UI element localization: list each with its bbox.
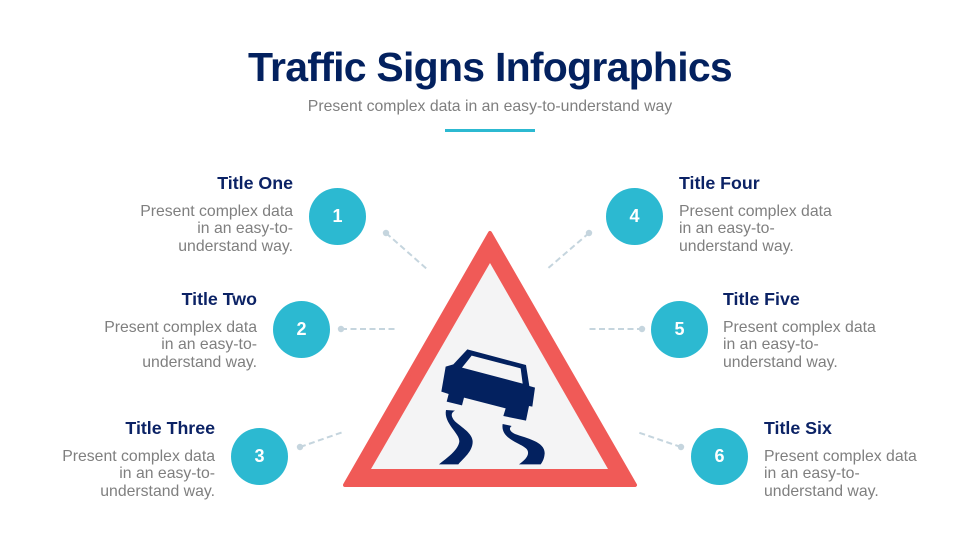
item 1: Title One: [217, 173, 293, 193]
icon: skidding car: [439, 349, 545, 464]
item 5: Present complex data: [723, 319, 876, 336]
item 1: understand way.: [178, 238, 293, 255]
badge 1: [309, 188, 366, 245]
badge 3: [231, 428, 288, 485]
title: Traffic Signs Infographics: [248, 44, 732, 90]
item 2: Present complex data: [104, 319, 257, 336]
item 4: understand way.: [679, 238, 794, 255]
item 2: understand way.: [142, 354, 257, 371]
item 5: in an easy-to-: [723, 336, 819, 353]
badge 6: [691, 428, 748, 485]
badge 3: 3: [254, 446, 264, 466]
item 2: [104, 289, 258, 371]
item 4: Title Four: [679, 173, 760, 193]
item 4: [679, 173, 832, 255]
item 6: in an easy-to-: [764, 465, 860, 482]
title underline: [445, 129, 535, 132]
badge 1: 1: [332, 206, 342, 226]
badge 5: 5: [674, 319, 684, 339]
badge 5: [651, 301, 708, 358]
item 3: in an easy-to-: [119, 465, 215, 482]
item 4: Present complex data: [679, 203, 832, 220]
badge 4: [606, 188, 663, 245]
item 5: [723, 289, 876, 371]
item 3: Title Three: [125, 418, 215, 438]
subtitle: Present complex data in an easy-to-understand way: [308, 98, 672, 115]
item 4: in an easy-to-: [679, 220, 775, 237]
badge 2: [273, 301, 330, 358]
item 1: [140, 173, 294, 255]
item 6: understand way.: [764, 483, 879, 500]
badge 2: 2: [296, 319, 306, 339]
item 2: Title Two: [182, 289, 257, 309]
item 3: understand way.: [100, 483, 215, 500]
item 3: [62, 418, 216, 500]
item 1: in an easy-to-: [197, 220, 293, 237]
item 6: [764, 418, 917, 500]
badge 4: 4: [629, 206, 640, 226]
item 6: Title Six: [764, 418, 832, 438]
badge 6: 6: [714, 446, 724, 466]
warning triangle: [345, 233, 635, 485]
item 2: in an easy-to-: [161, 336, 257, 353]
item 6: Present complex data: [764, 448, 917, 465]
item 5: Title Five: [723, 289, 800, 309]
item 1: Present complex data: [140, 203, 293, 220]
item 5: understand way.: [723, 354, 838, 371]
connector lines: [297, 230, 684, 450]
item 3: Present complex data: [62, 448, 215, 465]
